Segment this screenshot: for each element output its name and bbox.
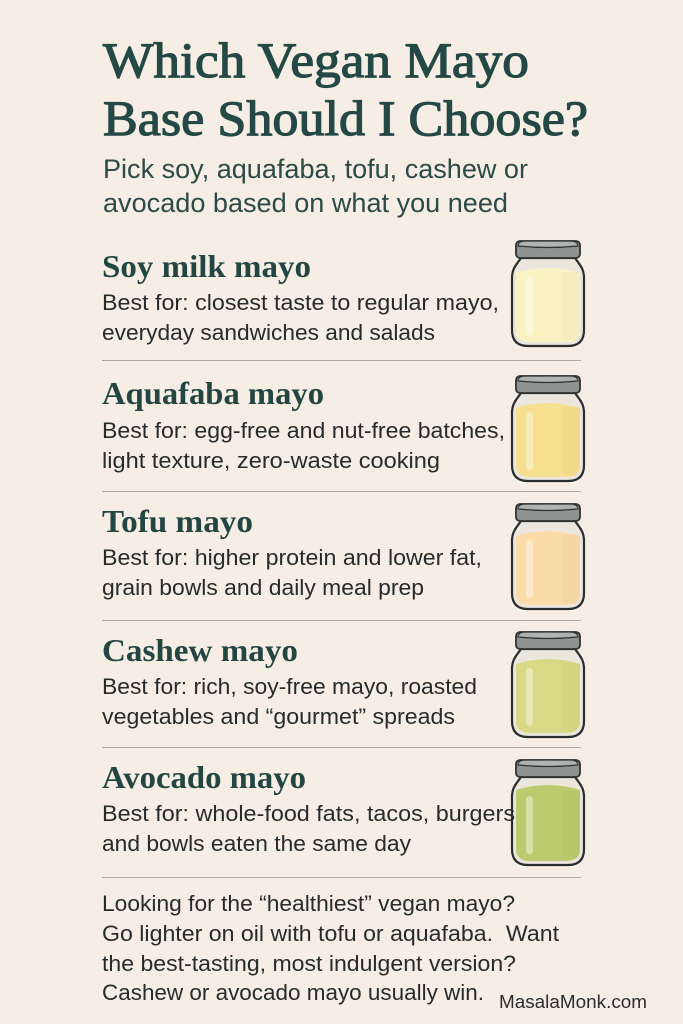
icon: cashew mayo jar xyxy=(512,632,584,737)
footer note: the best-tasting, most indulgent version? xyxy=(102,951,516,976)
panel: soy milk mayo xyxy=(102,248,499,345)
text: aquafaba mayo uses: Best for: egg-free and nut-free batches, xyxy=(102,418,505,443)
footer note: Cashew or avocado mayo usually win. xyxy=(102,980,484,1005)
title xyxy=(103,32,588,146)
panel: cashew mayo xyxy=(102,632,477,729)
panel: aquafaba mayo xyxy=(102,375,505,473)
icon: aquafaba mayo jar xyxy=(512,376,584,481)
heading: avocado mayo: Avocado mayo xyxy=(102,759,306,795)
heading: cashew mayo: Cashew mayo xyxy=(102,632,298,668)
text: avocado mayo uses: and bowls eaten the same day xyxy=(102,831,411,856)
text: tofu mayo uses: grain bowls and daily meal prep xyxy=(102,575,424,600)
icon: soy milk mayo jar xyxy=(512,241,584,346)
text: cashew mayo uses: Best for: rich, soy-free mayo, roasted xyxy=(102,674,477,699)
icon: avocado mayo jar xyxy=(512,760,584,865)
text: soy milk mayo uses: everyday sandwiches and salads xyxy=(102,320,435,345)
panel: tofu mayo xyxy=(102,503,482,600)
text: cashew mayo uses: vegetables and “gourmet” spreads xyxy=(102,704,455,729)
heading: tofu mayo: Tofu mayo xyxy=(102,503,253,539)
subtitle xyxy=(103,154,528,218)
subtitle: avocado based on what you need xyxy=(103,188,508,218)
text: soy milk mayo uses xyxy=(102,290,499,345)
text: avocado mayo uses xyxy=(102,801,515,856)
footer note: Looking for the “healthiest” vegan mayo? xyxy=(102,891,515,916)
text: soy milk mayo uses: Best for: closest taste to regular mayo, xyxy=(102,290,499,315)
title: Base Should I Choose? xyxy=(103,90,588,146)
text: cashew mayo uses xyxy=(102,674,477,729)
text: aquafaba mayo uses xyxy=(102,418,505,473)
text: aquafaba mayo uses: light texture, zero-waste cooking xyxy=(102,448,440,473)
heading: aquafaba mayo: Aquafaba mayo xyxy=(102,375,324,411)
text: tofu mayo uses xyxy=(102,545,482,600)
text: tofu mayo uses: Best for: higher protein and lower fat, xyxy=(102,545,482,570)
heading: soy milk mayo: Soy milk mayo xyxy=(102,248,311,284)
icon: tofu mayo jar xyxy=(512,504,584,609)
subtitle: Pick soy, aquafaba, tofu, cashew or xyxy=(103,154,528,184)
text: avocado mayo uses: Best for: whole-food fats, tacos, burgers xyxy=(102,801,515,826)
footer note xyxy=(102,891,559,1005)
title: Which Vegan Mayo xyxy=(103,32,529,88)
panel: avocado mayo xyxy=(102,759,515,856)
watermark: MasalaMonk.com xyxy=(499,992,647,1012)
footer note: Go lighter on oil with tofu or aquafaba. Want xyxy=(102,921,559,946)
